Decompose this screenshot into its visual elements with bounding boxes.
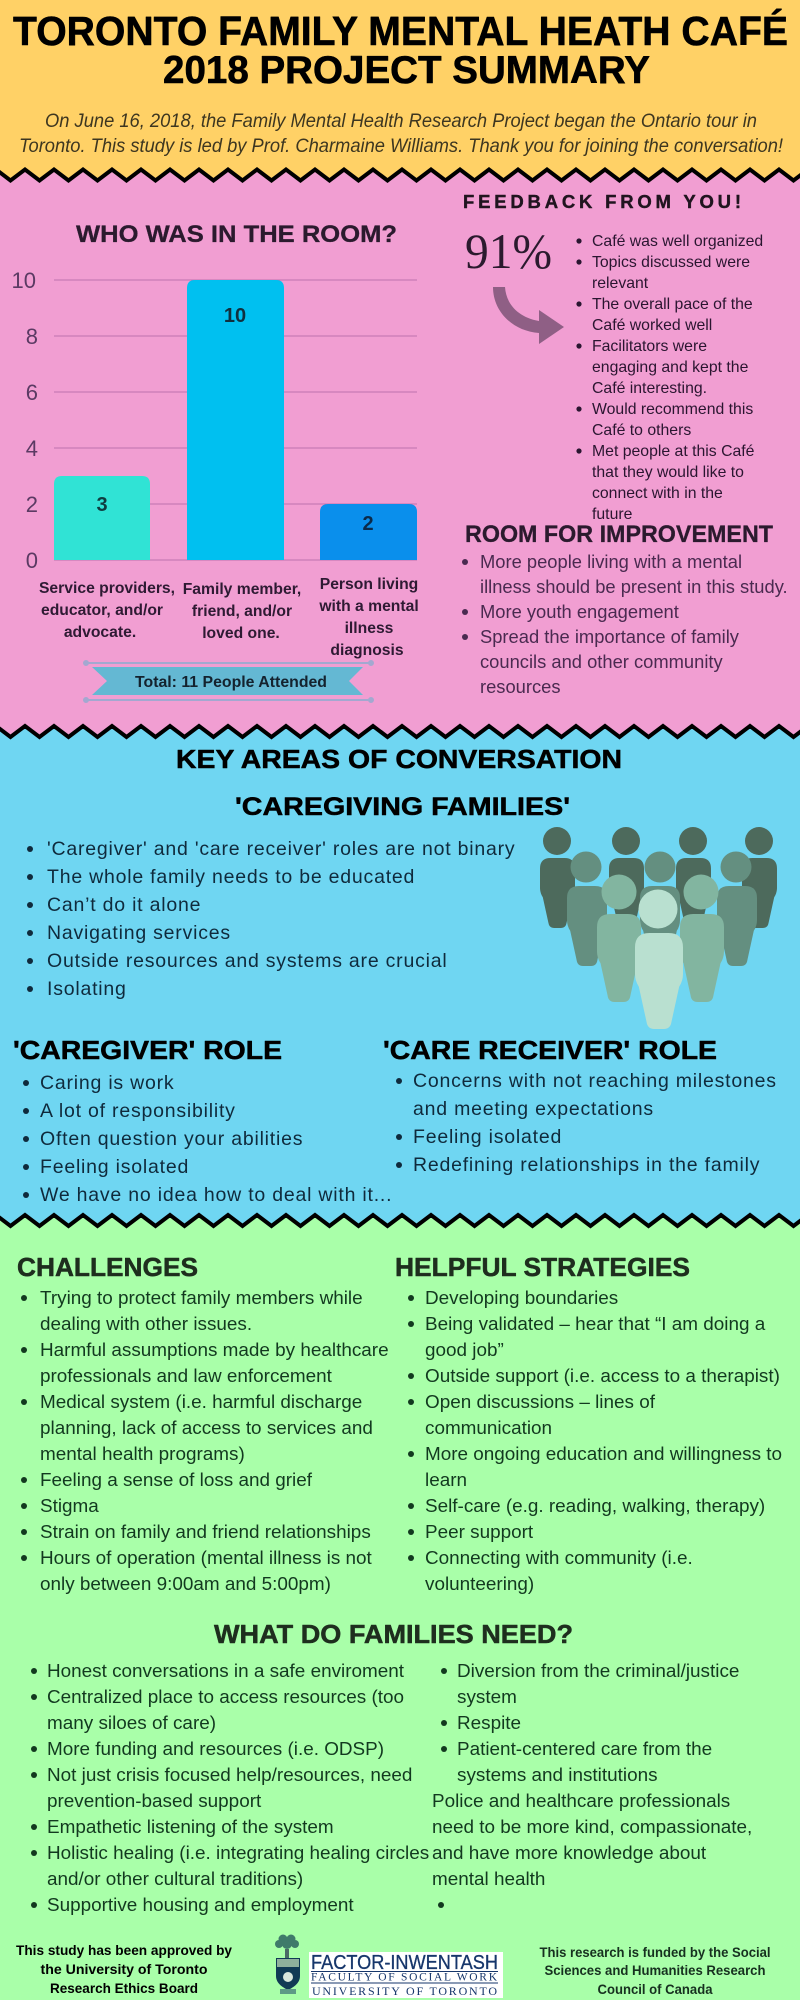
- families need list: left: Supportive housing and employment: [47, 1895, 354, 1916]
- families need list: left: prevention-based support: [47, 1791, 262, 1812]
- improvement list: [462, 551, 788, 697]
- challenges list: Feeling a sense of loss and grief: [40, 1470, 313, 1491]
- helpful strategies list: Open discussions – lines of: [425, 1392, 656, 1413]
- intro text: On June 16, 2018, the Family Mental Health Research Project began the Ontario tour in: [45, 110, 757, 132]
- helpful strategies list: learn: [425, 1470, 467, 1491]
- title: [13, 8, 788, 92]
- care receiver role list: Concerns with not reaching milestones: [413, 1070, 777, 1092]
- category labels: Service providers,: [39, 580, 175, 597]
- caregiver role list: Often question your abilities: [40, 1128, 303, 1150]
- challenges list: Stigma: [40, 1496, 99, 1517]
- axis labels: 0: [26, 548, 38, 573]
- helpful strategies list: Being validated – hear that “I am doing a: [425, 1314, 766, 1335]
- families need list: left: many siloes of care): [47, 1713, 216, 1734]
- families need list: right: Diversion from the criminal/justice: [457, 1661, 739, 1682]
- caregiver role list: A lot of responsibility: [40, 1100, 236, 1122]
- families need list: right: mental health: [432, 1869, 545, 1890]
- heading: what do families need: WHAT DO FAMILIES NEED?: [214, 1621, 573, 1649]
- families need list: right: Police and healthcare professionals: [432, 1791, 730, 1812]
- category labels: Family member,: [183, 581, 301, 598]
- banner: total attended: Total: 11 People Attended: [135, 674, 327, 691]
- families need list: left: Honest conversations in a safe enviroment: [47, 1661, 405, 1682]
- heading: challenges: CHALLENGES: [17, 1254, 198, 1282]
- category labels: with a mental: [318, 598, 419, 615]
- category labels: Person living: [320, 576, 418, 593]
- challenges list: only between 9:00am and 5:00pm): [40, 1574, 331, 1595]
- arrow: [493, 287, 564, 344]
- caregiving families list: Can’t do it alone: [47, 894, 201, 916]
- families need list: left: and/or other cultural traditions): [47, 1869, 303, 1890]
- footer: ethics approval: [16, 1942, 232, 1996]
- care receiver role list: [396, 1070, 777, 1176]
- challenges list: Trying to protect family members while: [40, 1288, 363, 1309]
- feedback list: relevant: [592, 275, 649, 292]
- helpful strategies list: good job”: [425, 1340, 504, 1361]
- intro text: [19, 110, 784, 157]
- bar chart: [12, 268, 419, 659]
- axis labels: 2: [26, 492, 38, 517]
- improvement list: More people living with a mental: [480, 551, 742, 572]
- helpful strategies list: Self-care (e.g. reading, walking, therapy): [425, 1496, 765, 1517]
- care receiver role list: Feeling isolated: [413, 1126, 562, 1148]
- helpful strategies list: [408, 1288, 782, 1595]
- footer: funding: Council of Canada: [598, 1982, 713, 1997]
- caregiver role list: We have no idea how to deal with it...: [40, 1184, 392, 1206]
- families need list: left: Empathetic listening of the system: [47, 1817, 334, 1838]
- caregiver role list: Caring is work: [40, 1072, 174, 1094]
- footer: ethics approval: the University of Toronto: [40, 1961, 208, 1977]
- category labels: friend, and/or: [192, 603, 292, 620]
- feedback list: Would recommend this: [592, 401, 753, 418]
- challenges list: mental health programs): [40, 1444, 245, 1465]
- families need list: left: Centralized place to access resources (too: [47, 1687, 404, 1708]
- families need list: left: Not just crisis focused help/resources, need: [47, 1765, 412, 1786]
- care receiver role list: and meeting expectations: [413, 1098, 654, 1120]
- heading: key areas: KEY AREAS OF CONVERSATION: [176, 744, 622, 774]
- caregiving families list: The whole family needs to be educated: [47, 866, 415, 888]
- panel: challenges, strategies and needs: [0, 1215, 800, 2000]
- category labels: loved one.: [202, 625, 280, 642]
- footer: ethics approval: This study has been approved by: [16, 1942, 232, 1958]
- category labels: illness: [345, 620, 394, 637]
- improvement list: More youth engagement: [480, 601, 679, 622]
- category labels: educator, and/or: [41, 602, 163, 619]
- families need list: right: Patient-centered care from the: [457, 1739, 712, 1760]
- feedback list: [576, 233, 763, 523]
- bar: service providers: 3: [96, 494, 108, 516]
- challenges list: planning, lack of access to services and: [40, 1418, 373, 1439]
- caregiver role list: Feeling isolated: [40, 1156, 189, 1178]
- bar: person living with illness: [320, 504, 417, 560]
- helpful strategies list: More ongoing education and willingness to: [425, 1444, 782, 1465]
- feedback list: The overall pace of the: [592, 296, 753, 313]
- caregiving families list: 'Caregiver' and 'care receiver' roles are not binary: [47, 838, 515, 860]
- feedback list: Café was well organized: [592, 233, 763, 250]
- helpful strategies list: Developing boundaries: [425, 1288, 618, 1309]
- bar: family member: 10: [224, 305, 246, 327]
- heading: caregiver role: 'CAREGIVER' ROLE: [13, 1037, 282, 1065]
- feedback list: Café to others: [592, 422, 691, 439]
- axis labels: [12, 268, 38, 573]
- stat: 91 percent: 91%: [465, 223, 552, 279]
- axis labels: 10: [12, 268, 36, 293]
- helpful strategies list: Connecting with community (i.e.: [425, 1548, 693, 1569]
- footer: ethics approval: Research Ethics Board: [50, 1980, 198, 1996]
- challenges list: Medical system (i.e. harmful discharge: [40, 1392, 362, 1413]
- heading: feedback from you: FEEDBACK FROM YOU!: [463, 191, 745, 212]
- category labels: [39, 576, 419, 659]
- logo: factor-inwentash: UNIVERSITY OF TORONTO: [312, 1984, 497, 1998]
- caregiving families list: Navigating services: [47, 922, 231, 944]
- helpful strategies list: Peer support: [425, 1522, 534, 1543]
- improvement list: Spread the importance of family: [480, 626, 740, 647]
- caregiving families list: [27, 838, 515, 1000]
- challenges list: Strain on family and friend relationships: [40, 1522, 371, 1543]
- families need list: right: system: [457, 1687, 517, 1708]
- feedback list: Met people at this Café: [592, 443, 755, 460]
- care receiver role list: Redefining relationships in the family: [413, 1154, 760, 1176]
- improvement list: councils and other community: [480, 651, 723, 672]
- category labels: diagnosis: [330, 642, 404, 659]
- caregiving families list: Isolating: [47, 978, 127, 1000]
- caregiver role list: [23, 1072, 392, 1206]
- challenges list: [21, 1288, 389, 1595]
- challenges list: dealing with other issues.: [40, 1314, 252, 1335]
- improvement list: illness should be present in this study.: [480, 576, 788, 597]
- families need list: left: Holistic healing (i.e. integrating healing circles: [47, 1843, 429, 1864]
- panel: who was in the room and feedback: [0, 170, 800, 740]
- families need list: left: [31, 1661, 429, 1916]
- feedback list: Café interesting.: [592, 380, 707, 397]
- icon: crest: [275, 1934, 300, 1994]
- panel: key areas of conversation: [0, 726, 800, 1226]
- icon: group of people: [540, 827, 777, 1029]
- panel: header: [0, 0, 800, 190]
- category labels: advocate.: [64, 624, 136, 641]
- feedback list: Café worked well: [592, 317, 712, 334]
- families need list: right: and have more knowledge about: [432, 1843, 707, 1864]
- banner: total attended: [84, 661, 373, 702]
- challenges list: Hours of operation (mental illness is not: [40, 1548, 373, 1569]
- feedback list: that they would like to: [592, 464, 744, 481]
- helpful strategies list: volunteering): [425, 1574, 534, 1595]
- logo: factor-inwentash: FACTOR-INWENTASH: [311, 1952, 498, 1974]
- axis labels: 8: [26, 324, 38, 349]
- challenges list: Harmful assumptions made by healthcare: [40, 1340, 389, 1361]
- bar: service providers: [54, 476, 150, 560]
- footer: funding: Sciences and Humanities Research: [544, 1963, 766, 1978]
- bar: person living with illness: 2: [362, 513, 374, 535]
- logo: factor-inwentash: [275, 1934, 503, 1998]
- footer: funding: This research is funded by the Social: [540, 1945, 770, 1960]
- heading: care receiver role: 'CARE RECEIVER' ROLE: [383, 1037, 717, 1065]
- helpful strategies list: communication: [425, 1418, 552, 1439]
- families need list: right: need to be more kind, compassionate,: [432, 1817, 752, 1838]
- heading: room for improvement: ROOM FOR IMPROVEMENT: [465, 521, 773, 548]
- heading: helpful strategies: HELPFUL STRATEGIES: [395, 1254, 690, 1282]
- families need list: right: Respite: [457, 1713, 521, 1734]
- axis labels: 4: [26, 436, 38, 461]
- feedback list: future: [592, 506, 633, 523]
- feedback list: connect with in the: [592, 485, 723, 502]
- title: 2018 PROJECT SUMMARY: [163, 49, 650, 92]
- families need list: left: More funding and resources (i.e. ODSP): [47, 1739, 384, 1760]
- improvement list: resources: [480, 676, 561, 697]
- feedback list: engaging and kept the: [592, 359, 749, 376]
- feedback list: Facilitators were: [592, 338, 707, 355]
- heading: who was in the room: WHO WAS IN THE ROOM?: [76, 221, 397, 248]
- footer: funding: [540, 1945, 770, 1997]
- challenges list: professionals and law enforcement: [40, 1366, 333, 1387]
- logo: factor-inwentash: FACULTY OF SOCIAL WORK: [311, 1972, 498, 1984]
- feedback list: Topics discussed were: [592, 254, 750, 271]
- families need list: right: [432, 1661, 752, 1908]
- axis labels: 6: [26, 380, 38, 405]
- heading: caregiving families: 'CAREGIVING FAMILIES': [235, 793, 570, 821]
- caregiving families list: Outside resources and systems are crucial: [47, 950, 447, 972]
- helpful strategies list: Outside support (i.e. access to a therapist): [425, 1366, 780, 1387]
- families need list: right: systems and institutions: [457, 1765, 658, 1786]
- bar: family member: [187, 280, 284, 560]
